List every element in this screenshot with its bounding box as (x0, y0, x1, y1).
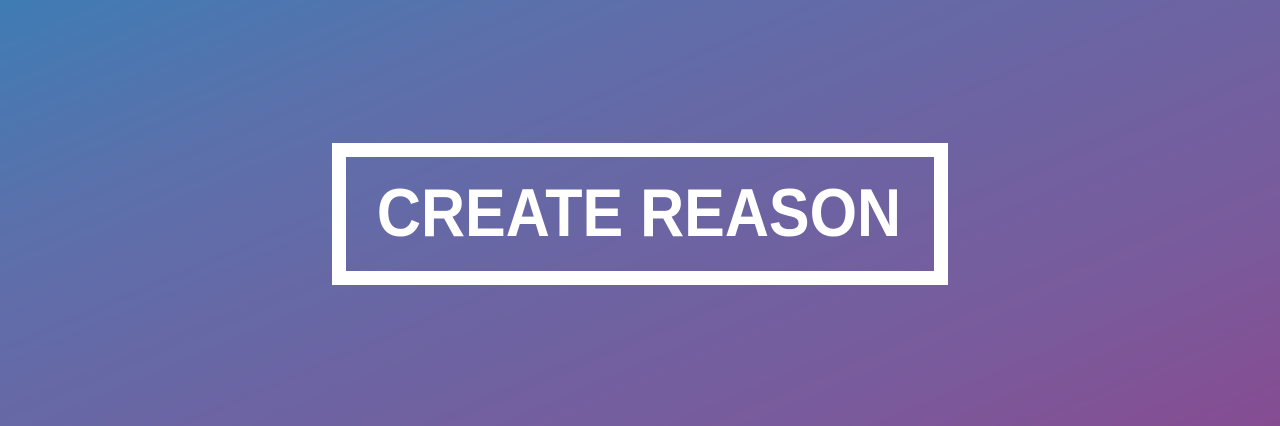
title: CREATE REASON (377, 175, 901, 251)
logo frame (332, 143, 948, 285)
